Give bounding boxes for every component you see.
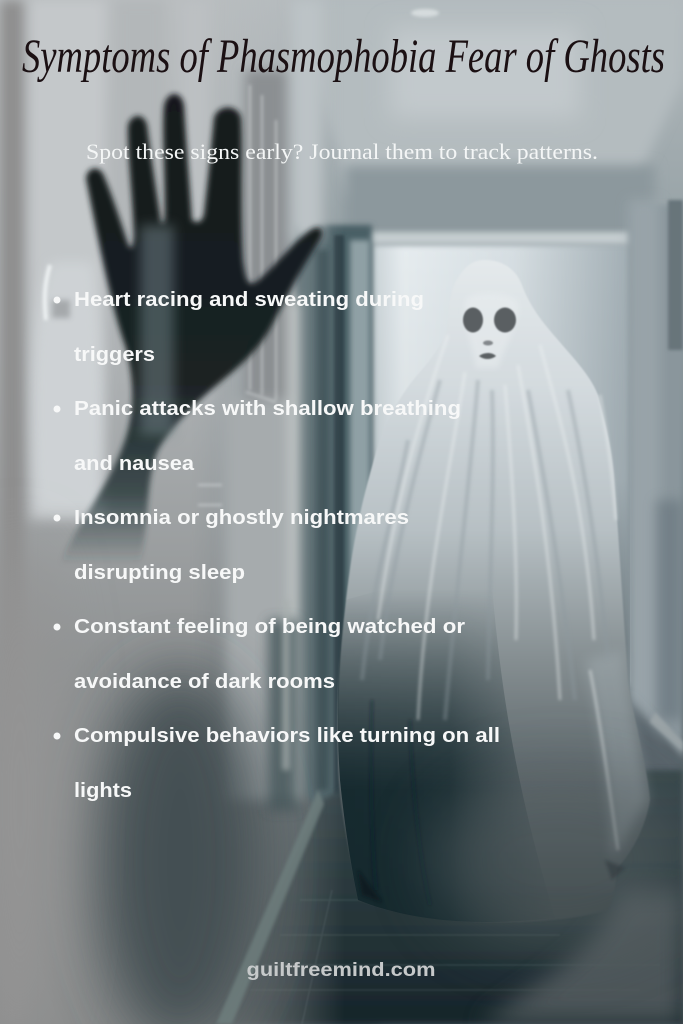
left hallway column: [296, 225, 372, 840]
overlay dark lower patch: [95, 670, 265, 1024]
symptom 2: Panic attacks with shallow breathing: [74, 397, 461, 420]
symptom 4: Constant feeling of being watched or: [74, 615, 465, 638]
symptom list: [54, 288, 500, 802]
subtitle: Spot these signs early? Journal them to track patterns.: [86, 139, 598, 164]
symptom 1: Heart racing and sweating during: [74, 288, 424, 311]
bottom fog: [430, 770, 683, 950]
floor: [212, 770, 683, 1024]
symptom 3: Insomnia or ghostly nightmares: [74, 506, 409, 529]
background figure: [33, 262, 101, 510]
ghost hem: [358, 860, 625, 902]
symptom 5: lights: [74, 779, 132, 802]
symptom 3: [54, 506, 409, 584]
symptom 4: avoidance of dark rooms: [74, 670, 335, 693]
ghost nose and mouth: [479, 340, 496, 359]
symptom 2: [54, 397, 461, 475]
symptom 2: and nausea: [74, 452, 195, 475]
symptom 1: triggers: [74, 343, 155, 366]
symptom 1: [54, 288, 424, 366]
doorway: [372, 245, 630, 685]
left translucent overlay: [0, 0, 345, 1024]
ghost sheet folds: [362, 335, 618, 905]
overlay door panel edges: [198, 85, 276, 505]
right wall: [628, 205, 683, 760]
palm translucency: [140, 225, 174, 435]
ghost face: [465, 293, 519, 368]
symptom 4: [54, 615, 465, 693]
overlay wall stripes: [0, 0, 322, 1024]
symptom 5: Compulsive behaviors like turning on all: [74, 724, 500, 747]
ghost eyes: [463, 308, 516, 332]
symptom 3: disrupting sleep: [74, 561, 245, 584]
ghost sheet body: [337, 260, 650, 922]
illustration: shadow hand: [60, 94, 322, 565]
footer: website: guiltfreemind.com: [246, 960, 436, 981]
illustration: sheet ghost: [337, 260, 650, 922]
symptom 5: [54, 724, 500, 802]
